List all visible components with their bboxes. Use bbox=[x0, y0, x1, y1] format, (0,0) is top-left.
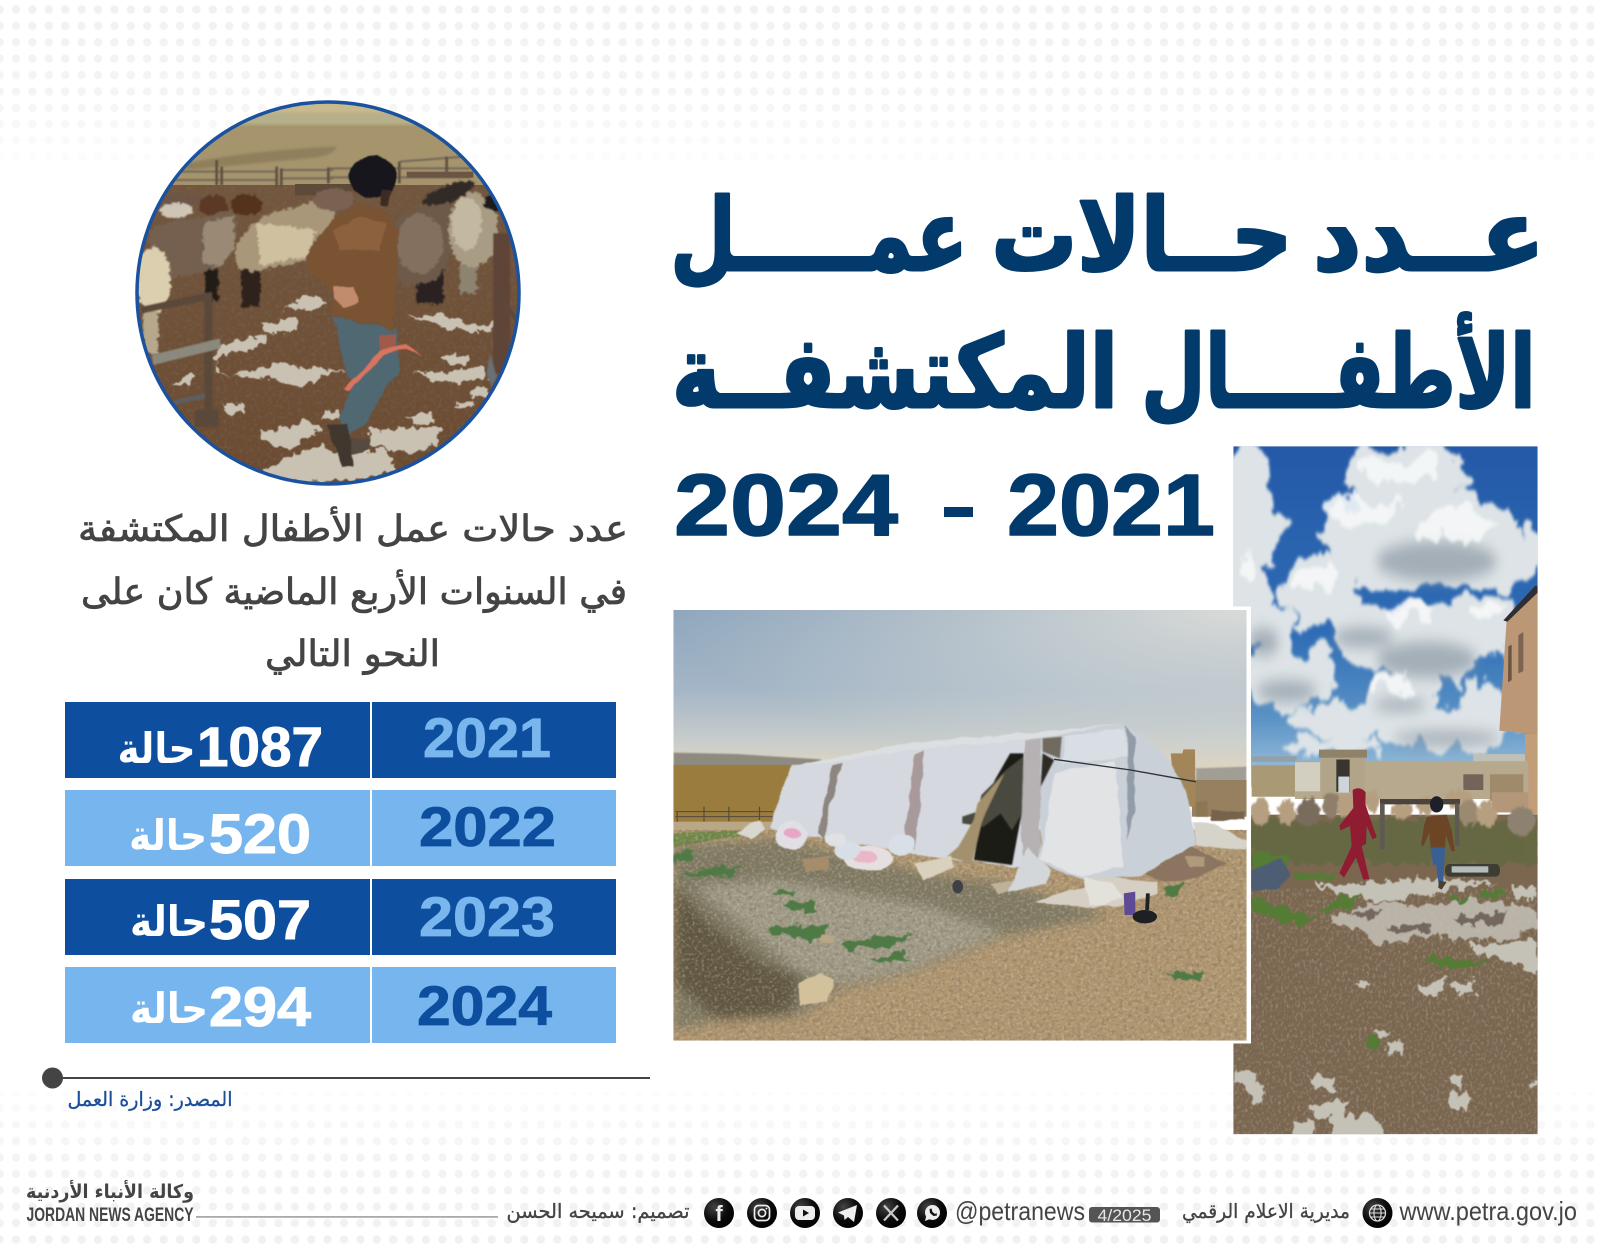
footer: agency logo text: وكالة الأنباء الأردنية bbox=[26, 1180, 194, 1203]
ground bbox=[1233, 815, 1538, 1140]
row 2024: 294 bbox=[209, 975, 311, 1038]
title bbox=[670, 177, 1545, 554]
footer: department name: مديرية الاعلام الرقمي bbox=[1182, 1199, 1350, 1224]
title line 2, word 2: المكتشفــة bbox=[672, 314, 1118, 431]
sheep row bbox=[1251, 790, 1537, 836]
intro line 2: في السنوات الأربع الماضية كان على bbox=[81, 569, 627, 613]
row 2023: 507 bbox=[209, 888, 311, 951]
title year 2024: 2024 bbox=[674, 457, 898, 554]
horizon and far field bbox=[1252, 756, 1297, 762]
intro line 1: عدد حالات عمل الأطفال المكتشفة bbox=[78, 506, 628, 550]
icon: globe bbox=[1362, 1198, 1392, 1228]
title line 1, word 3: عمـــــل bbox=[670, 177, 968, 294]
row 2022 bbox=[65, 790, 616, 866]
wall behind tent bbox=[1171, 749, 1196, 807]
icon: whatsapp bbox=[917, 1198, 947, 1228]
row 2021: 2021 bbox=[423, 706, 551, 769]
title dash bbox=[944, 507, 973, 517]
tent doorway bbox=[947, 737, 1062, 865]
footer: website: www.petra.gov.jo bbox=[1399, 1196, 1577, 1226]
title line 1, word 2: حــالات bbox=[992, 177, 1292, 294]
footer: agency logo text bbox=[26, 1180, 194, 1226]
row 2023: حالة bbox=[130, 897, 208, 946]
bags and stones along tent base bbox=[737, 802, 1247, 1007]
tent body bbox=[769, 724, 1196, 882]
footer: designer credit: تصميم: سميحه الحسن bbox=[506, 1199, 690, 1223]
row 2024: حالة bbox=[130, 984, 208, 1033]
title line 1, word 1: عــدد bbox=[1313, 177, 1545, 294]
row 2022: حالة bbox=[129, 811, 207, 860]
row 2022: 2022 bbox=[419, 795, 556, 858]
intro line 3: النحو التالي bbox=[265, 634, 440, 675]
icon: instagram bbox=[747, 1198, 777, 1228]
source line with dot marker bbox=[42, 1068, 650, 1088]
row 2021: حالة bbox=[118, 724, 196, 773]
row 2022: 520 bbox=[209, 802, 311, 865]
row 2024 bbox=[65, 967, 616, 1043]
title year 2021: 2021 bbox=[1007, 457, 1215, 554]
footer: agency logo text: JORDAN NEWS AGENCY bbox=[26, 1205, 194, 1226]
icon: facebook bbox=[704, 1198, 734, 1228]
footer: social handle: @petranews bbox=[955, 1196, 1085, 1226]
icon: telegram bbox=[833, 1198, 863, 1228]
clouds bbox=[1218, 442, 1543, 757]
intro paragraph bbox=[78, 506, 628, 675]
white patches bbox=[172, 293, 492, 483]
icon: facebook: f bbox=[715, 1201, 723, 1226]
icon: youtube bbox=[790, 1198, 820, 1228]
photo: sheep pen under cloudy sky with two children bbox=[1218, 442, 1543, 1140]
footer: date badge: 4/2025 bbox=[1098, 1206, 1152, 1225]
row 2023: 2023 bbox=[419, 885, 555, 948]
row 2023 bbox=[65, 879, 616, 955]
photo: white tent on gravel ground with white frame bbox=[670, 606, 1251, 1044]
children bbox=[1339, 788, 1455, 890]
data table: cases per year bbox=[65, 702, 616, 1043]
icon: X bbox=[876, 1198, 906, 1228]
source text: المصدر: وزارة العمل bbox=[68, 1087, 232, 1111]
sheep bbox=[136, 176, 503, 353]
building bbox=[1499, 590, 1538, 734]
ground bbox=[673, 830, 1247, 1041]
row 2024: 2024 bbox=[417, 974, 552, 1037]
row 2021 bbox=[65, 702, 616, 778]
boy bbox=[307, 156, 422, 467]
row 2021: 1087 bbox=[197, 715, 323, 778]
photo: boy herding sheep in circular frame bbox=[133, 100, 523, 495]
fences bbox=[142, 233, 517, 427]
social icons bbox=[704, 1198, 947, 1228]
